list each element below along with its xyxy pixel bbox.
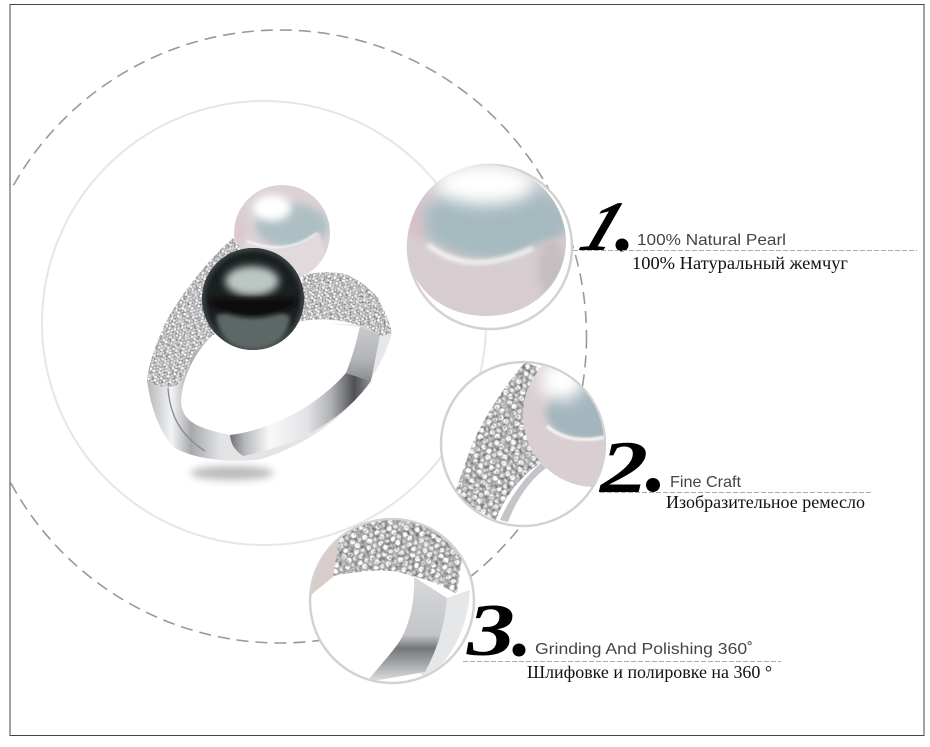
pave band left xyxy=(147,238,250,387)
pave close-up xyxy=(455,362,545,520)
outer silver strip xyxy=(420,590,470,682)
callout 1 xyxy=(571,187,917,273)
ring shank xyxy=(147,322,392,461)
dot 2 xyxy=(646,478,660,492)
russian label 1: 100% Натуральный жемчуг xyxy=(632,253,848,273)
english label 1: 100% Natural Pearl xyxy=(637,232,786,249)
black pearl xyxy=(200,245,306,351)
left shank groove xyxy=(168,388,205,451)
numeral 1: 1 xyxy=(571,187,637,265)
inner band surface xyxy=(230,373,371,456)
leader line 1 xyxy=(573,250,917,252)
band close-up xyxy=(500,463,546,522)
ring illustration xyxy=(147,180,392,480)
pink pearl edge xyxy=(312,540,339,594)
dashed outer circle xyxy=(0,30,586,643)
english label 3: Grinding And Polishing 360˚ xyxy=(535,641,753,658)
leader line 2 xyxy=(600,492,871,494)
inner right of band xyxy=(346,326,380,381)
english label 2: Fine Craft xyxy=(670,474,742,491)
pave band right xyxy=(298,272,392,336)
dot 3 xyxy=(512,644,526,656)
silver band xyxy=(367,577,447,682)
russian label 3: Шлифовке и полировке на 360 ° xyxy=(527,662,772,682)
callout 3 xyxy=(463,590,781,682)
detail circle 1: pearl xyxy=(400,155,575,329)
numeral 3: 3 xyxy=(466,590,515,672)
pearl close-up xyxy=(523,366,604,487)
detail circle 2: craft xyxy=(440,360,606,528)
dot 1 xyxy=(616,238,628,252)
thin inner circle xyxy=(42,101,486,545)
leader line 3 xyxy=(463,660,781,662)
pave close-up xyxy=(333,517,462,594)
russian label 2: Изобразительное ремесло xyxy=(666,492,865,512)
ring opening xyxy=(181,320,360,435)
callout 2 xyxy=(599,427,871,512)
detail circle 3: polishing xyxy=(305,517,474,683)
white pearl xyxy=(234,185,330,278)
numeral 2: 2 xyxy=(599,427,648,509)
ring shadow xyxy=(190,466,274,480)
